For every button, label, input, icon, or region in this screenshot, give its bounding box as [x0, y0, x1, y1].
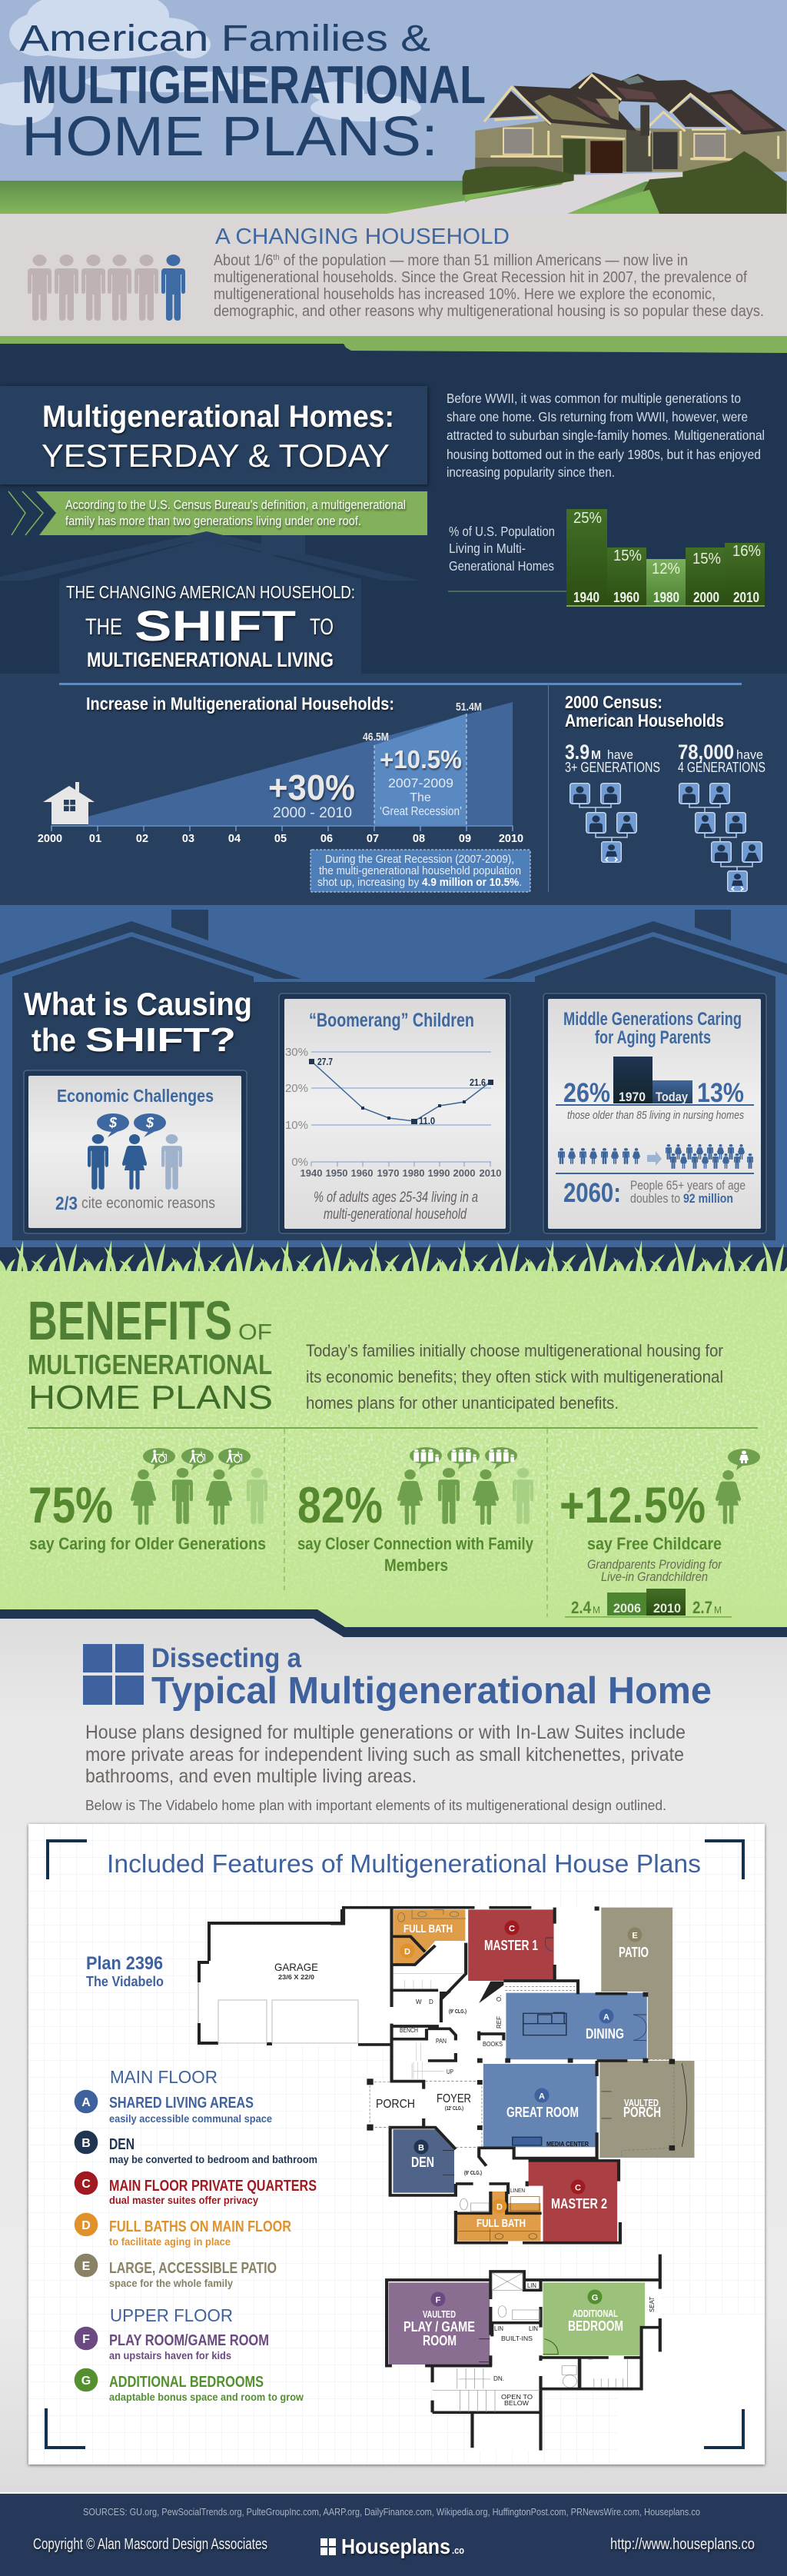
- house-shaped heading: the shift: TO: [310, 614, 334, 640]
- stat: 75 percent: 75%: [28, 1476, 113, 1533]
- bar comparison: 1970: [619, 1090, 646, 1104]
- stat: free childcare: Live-in Grandchildren: [601, 1569, 708, 1584]
- floor plan: main floor: [198, 1906, 695, 2243]
- small plan labels: (12' CLG.): [445, 2106, 463, 2112]
- posts: [367, 1906, 675, 2151]
- floor plan: upper floor: [385, 2255, 661, 2451]
- room labels: PATIO: [619, 1945, 649, 1960]
- corner brackets: [45, 1839, 745, 2449]
- room labels: MASTER 1: [484, 1938, 538, 1953]
- panel: economic challenges: Economic Challenges: [57, 1086, 214, 1106]
- legend item F: F: [82, 2333, 90, 2346]
- room markers: D: [404, 1947, 410, 1956]
- legend item E: LARGE, ACCESSIBLE PATIO: [109, 2260, 277, 2277]
- intro text: House plans designed for multiple generations or with In-Law Suites include: [85, 1722, 686, 1743]
- room markers: B: [418, 2144, 424, 2153]
- bar comparison: [556, 1057, 754, 1122]
- line chart: 1950: [326, 1167, 347, 1179]
- panel: economic challenges: cite economic reasons: [81, 1195, 215, 1212]
- legend item A: [75, 2090, 272, 2125]
- room fills: [468, 1909, 554, 1981]
- small plan labels: W: [416, 1999, 422, 2005]
- small plan labels: BOOKS: [483, 2041, 503, 2048]
- panel: economic challenges: 2/3: [55, 1193, 78, 1214]
- intro text: more private areas for independent living such as small kitchenettes, private: [85, 1744, 684, 1766]
- bar chart: population share: Living in Multi-: [449, 541, 526, 556]
- bar comparison: Today: [656, 1090, 688, 1104]
- bar chart: population share: Generational Homes: [449, 558, 554, 574]
- room markers: G: [592, 2293, 598, 2302]
- area chart: 09: [459, 833, 471, 845]
- panel: middle generations caring: 2060:: [563, 1178, 621, 1208]
- census stats: 3+ GENERATIONS: [565, 760, 660, 775]
- room markers: A: [539, 2092, 545, 2101]
- definition banner: According to the U.S. Census Bureau’s definition, a multigenerational: [65, 498, 406, 512]
- room labels: DINING: [586, 2026, 624, 2042]
- legend item B: may be converted to bedroom and bathroom: [109, 2153, 317, 2165]
- legend item F: an upstairs haven for kids: [109, 2349, 231, 2361]
- area chart: ‘Great Recession’: [380, 805, 462, 818]
- legend item G: [75, 2368, 304, 2403]
- small plan labels: PAN: [436, 2038, 447, 2045]
- small plan labels: D: [429, 1999, 433, 2005]
- small plan labels: PORCH: [376, 2098, 415, 2111]
- title: [19, 18, 486, 168]
- house silhouettes: [0, 910, 787, 1240]
- panel: middle generations caring: People 65+ years of age: [630, 1178, 745, 1193]
- line chart: 1990: [428, 1167, 450, 1179]
- definition banner: family has more than two generations living under one roof.: [65, 514, 361, 528]
- panel: middle generations caring: [543, 993, 766, 1233]
- line chart: 1980: [403, 1167, 424, 1179]
- census stats: 4 GENERATIONS: [678, 760, 765, 775]
- bar chart: population share: 15%: [613, 547, 642, 564]
- legend item G: adaptable bonus space and room to grow: [109, 2391, 304, 2403]
- family tree: four generations: [679, 784, 762, 891]
- area chart: 07: [367, 833, 379, 845]
- small plan labels: UP: [447, 2068, 453, 2075]
- legend item B: [75, 2131, 317, 2165]
- callout: great recession: During the Great Recession (2007-2009),: [325, 853, 514, 866]
- panel: boomerang children: “Boomerang” Children: [309, 1010, 474, 1031]
- line chart: 1940: [301, 1167, 322, 1179]
- header sky panel: [0, 0, 787, 214]
- house-shaped heading: the shift: THE: [85, 614, 122, 640]
- line chart: 11.0: [419, 1115, 435, 1127]
- bar chart: population share: 2000: [693, 590, 719, 605]
- intro text: About 1/6: [214, 252, 280, 269]
- icon: speech bubbles with dollars: $: [145, 1115, 154, 1130]
- room markers: F: [436, 2296, 441, 2305]
- legend item C: C: [81, 2178, 91, 2191]
- line chart: 1970: [377, 1167, 399, 1179]
- room markers: [430, 2290, 603, 2307]
- navy ground and grass: [0, 1247, 787, 1272]
- garage: 23/6 X 22/0: [278, 1974, 315, 1981]
- area chart: 51.4M: [456, 701, 482, 714]
- heading: Dissecting a: [151, 1643, 301, 1673]
- small plan labels: O.: [496, 1995, 503, 2002]
- room markers: D: [496, 2202, 503, 2212]
- logo: Houseplans: [341, 2534, 450, 2558]
- panel: boomerang children: multi-generational household: [324, 1206, 467, 1223]
- house-shaped heading: the shift: [0, 531, 420, 674]
- room labels: [403, 1922, 661, 2230]
- heading panel: Multigenerational Homes:: [42, 400, 394, 434]
- line chart: 21.6: [470, 1077, 486, 1088]
- panel: economic challenges: [24, 1070, 247, 1233]
- intro text: multigenerational households has increased 10%. Here we explore the economic,: [214, 286, 716, 303]
- grey page background for lower section: [0, 1619, 787, 2494]
- census stats: have: [736, 747, 763, 762]
- room labels: VAULTED: [423, 2308, 456, 2320]
- area chart: 2000 - 2010: [273, 805, 352, 821]
- line chart: 2000: [453, 1167, 475, 1179]
- line chart: 1960: [351, 1167, 373, 1179]
- stat: free childcare: +12.5%: [560, 1476, 706, 1533]
- legend item E: E: [82, 2260, 91, 2273]
- room labels: GREAT ROOM: [506, 2105, 579, 2120]
- room labels: DEN: [411, 2155, 434, 2170]
- room labels: MASTER 2: [551, 2196, 607, 2212]
- house-shaped heading: the shift: SHIFT: [134, 601, 296, 650]
- footer: [0, 2492, 787, 2576]
- legend item F: PLAY ROOM/GAME ROOM: [109, 2332, 269, 2349]
- small plan labels: LINEN: [510, 2188, 525, 2194]
- line chart: 10%: [285, 1119, 308, 1132]
- legend item E: space for the whole family: [109, 2277, 233, 2289]
- room markers: [400, 1921, 643, 2213]
- room labels: PORCH: [623, 2105, 661, 2120]
- garage: [198, 1908, 392, 2045]
- room markers: C: [509, 1924, 515, 1933]
- intro text: th: [273, 253, 280, 262]
- heading: MULTIGENERATIONAL: [28, 1349, 272, 1380]
- census stats: 2000 Census:: [565, 692, 662, 712]
- area chart: 04: [228, 833, 241, 845]
- bar chart: population share: 16%: [732, 543, 761, 560]
- legend item D: to facilitate aging in place: [109, 2235, 231, 2248]
- history text: share one home. GIs returning from WWII, however, were: [447, 409, 748, 424]
- legend: main and upper floor: MAIN FLOOR: [110, 2067, 218, 2087]
- media center: [513, 2137, 542, 2145]
- area chart: 02: [136, 833, 148, 845]
- legend item C: dual master suites offer privacy: [109, 2194, 258, 2206]
- room labels: FULL BATH: [477, 2217, 526, 2230]
- room labels: ROOM: [423, 2333, 457, 2348]
- area chart: The: [410, 791, 431, 804]
- house-shaped heading: the shift: MULTIGENERATIONAL LIVING: [87, 648, 334, 671]
- line chart: 30%: [285, 1046, 308, 1059]
- bar comparison: M: [714, 1604, 722, 1616]
- small plan labels: LIN: [494, 2325, 503, 2332]
- stat: free childcare: say Free Childcare: [587, 1534, 722, 1553]
- icon: three people: [88, 1134, 182, 1190]
- intro text: Today’s families initially choose multigenerational housing for: [306, 1341, 723, 1360]
- house-shaped heading: the shift: THE CHANGING AMERICAN HOUSEHOLD:: [66, 582, 355, 602]
- legend item A: easily accessible communal space: [109, 2112, 272, 2125]
- small plan labels: REF: [496, 2016, 503, 2029]
- stat: free childcare: Grandparents Providing for: [587, 1557, 722, 1572]
- bar chart: population share: 25%: [573, 510, 602, 527]
- heading: [24, 986, 252, 1059]
- bar comparison: M: [593, 1604, 600, 1616]
- panel: middle generations caring: for Aging Parents: [595, 1027, 711, 1048]
- area chart: 01: [89, 833, 101, 845]
- clouds: [0, 0, 421, 125]
- heading panel: [0, 386, 427, 484]
- intro text: its economic benefits; they often stick with multigenerational: [306, 1367, 723, 1386]
- bar chart: population share: 1980: [653, 590, 679, 605]
- driveway: [387, 172, 684, 214]
- census stats: American Households: [565, 711, 724, 731]
- history text: increasing popularity since then.: [447, 464, 615, 480]
- room labels: [403, 2308, 623, 2348]
- area chart: 2007-2009: [388, 776, 453, 790]
- history text: [447, 391, 765, 480]
- census stats: have: [607, 747, 633, 762]
- bar chart: population share: 1940: [573, 590, 599, 605]
- callout: great recession: the multi-generational household population: [319, 864, 521, 877]
- line chart: 0%: [291, 1156, 308, 1169]
- bar comparison: [565, 1589, 732, 1618]
- legend: main and upper floor: UPPER FLOOR: [110, 2305, 233, 2325]
- rooms and walls: [330, 1906, 695, 2243]
- section: dissecting a typical home: [0, 1609, 787, 2465]
- area chart: 2000: [38, 833, 62, 845]
- room markers: E: [632, 1932, 638, 1941]
- room markers: C: [575, 2184, 581, 2193]
- heading: BENEFITS: [28, 1291, 232, 1352]
- small plan labels: DN.: [493, 2375, 504, 2382]
- heading: OF: [238, 1320, 272, 1345]
- copyright: Copyright © Alan Mascord Design Associates: [33, 2536, 267, 2553]
- stat: 82 percent: [297, 1447, 534, 1575]
- plan name: Plan 2396: [86, 1953, 163, 1974]
- legend item B: DEN: [109, 2136, 134, 2153]
- intro text: [306, 1341, 723, 1413]
- area chart: 46.5M: [363, 731, 389, 744]
- area chart: +10.5%: [380, 745, 462, 774]
- stat: 82 percent: Members: [384, 1556, 448, 1575]
- title: MULTIGENERATIONAL: [22, 55, 486, 115]
- area chart: 2010: [499, 833, 523, 845]
- area chart: 06: [320, 833, 333, 845]
- section: benefits: [0, 1271, 787, 1627]
- stat: 75 percent: [28, 1448, 267, 1553]
- definition banner: [8, 491, 427, 535]
- heading: SHIFT?: [85, 1021, 236, 1059]
- bar chart: population share: % of U.S. Population: [449, 524, 555, 539]
- area chart: 08: [413, 833, 425, 845]
- census stats: M: [591, 749, 601, 762]
- room labels: VAULTED: [624, 2097, 659, 2108]
- area chart: 05: [274, 833, 287, 845]
- icon: family bubbles: [410, 1447, 517, 1469]
- line chart: 2010: [480, 1167, 501, 1179]
- legend item E: [75, 2254, 277, 2289]
- icon: window logo: [83, 1644, 144, 1705]
- bar comparison: 13%: [697, 1078, 744, 1108]
- legend item C: MAIN FLOOR PRIVATE QUARTERS: [109, 2178, 317, 2195]
- bar comparison: 2.4: [571, 1598, 592, 1617]
- panel title: Included Features of Multigenerational House Plans: [107, 1849, 701, 1878]
- small plan labels: OPEN TO: [501, 2394, 533, 2401]
- area chart: 03: [182, 833, 194, 845]
- heading: [151, 1643, 712, 1712]
- legend item A: A: [81, 2096, 91, 2109]
- intro text: [214, 252, 764, 320]
- history text: Before WWII, it was common for multiple generations to: [447, 391, 741, 406]
- icon: house at start of chart: [43, 782, 95, 824]
- kitchen island: [523, 2012, 566, 2035]
- heading: What is Causing: [24, 986, 252, 1022]
- walls: [330, 1908, 627, 2195]
- line chart: 27.7: [317, 1056, 333, 1067]
- room markers: A: [603, 2013, 609, 2022]
- icon: baby bubble: [728, 1449, 760, 1470]
- legend item B: B: [81, 2137, 91, 2150]
- line chart: 20%: [285, 1082, 308, 1095]
- legend item D: D: [81, 2219, 91, 2232]
- intro text: Below is The Vidabelo home plan with important elements of its multigenerational design outlined.: [85, 1798, 666, 1813]
- small plan labels: [376, 1995, 589, 2194]
- heading: A CHANGING HOUSEHOLD: [215, 225, 510, 249]
- section: what is causing the shift: [0, 905, 787, 1272]
- legend item D: FULL BATHS ON MAIN FLOOR: [109, 2218, 291, 2235]
- stat: free childcare: [560, 1449, 760, 1618]
- icon: population doubling: [558, 1144, 753, 1169]
- panel: a changing household: [0, 214, 787, 336]
- plan name: [86, 1953, 164, 1989]
- intro text: bathrooms, and even multiple living areas.: [85, 1766, 417, 1787]
- legend item D: [75, 2213, 291, 2248]
- icon: six people, one highlighted: [28, 255, 185, 321]
- legend item C: [75, 2172, 317, 2206]
- line chart: [285, 1046, 501, 1179]
- heading: Increase in Multigenerational Households:: [86, 694, 394, 714]
- family tree: three generations: [570, 784, 636, 862]
- small plan labels: FOYER: [437, 2092, 471, 2105]
- heading: [28, 1291, 273, 1416]
- small plan labels: SEAT: [649, 2297, 656, 2312]
- bar chart: population share: [448, 509, 765, 606]
- plan name: The Vidabelo: [86, 1974, 164, 1989]
- heading panel: YESTERDAY & TODAY: [42, 438, 390, 474]
- small plan labels: BENCH: [400, 2027, 418, 2034]
- callout: great recession: shot up, increasing by 4.9 million or 10.5%.: [317, 876, 522, 889]
- intro text: [85, 1722, 686, 1813]
- bar chart: population share: 1960: [613, 590, 639, 605]
- room labels: PLAY / GAME: [403, 2319, 475, 2335]
- bar comparison: 2.7: [692, 1598, 712, 1617]
- icon: speech bubbles with dollars: $: [108, 1115, 118, 1130]
- room labels: FULL BATH: [403, 1922, 453, 1935]
- area chart: +30%: [268, 767, 355, 807]
- title: HOME PLANS:: [22, 106, 438, 168]
- bar comparison: 2006: [613, 1601, 641, 1616]
- area chart: [38, 701, 523, 845]
- small plan labels: BELOW: [504, 2400, 529, 2407]
- bar comparison: 2010: [653, 1601, 681, 1616]
- website: http://www.houseplans.co: [610, 2536, 755, 2553]
- room labels: BEDROOM: [568, 2318, 623, 2334]
- bar chart: population share: 15%: [692, 551, 721, 567]
- callout: great recession: [310, 850, 530, 892]
- stat: 75 percent: say Caring for Older Generations: [29, 1534, 266, 1553]
- panel: middle generations caring: doubles to 92 million: [630, 1191, 733, 1206]
- fixtures and doors: [393, 1909, 466, 1936]
- small plan labels: (9' CLG.): [464, 2171, 482, 2176]
- legend item F: [75, 2327, 269, 2361]
- heading: Typical Multigenerational Home: [151, 1670, 712, 1712]
- house illustration: [475, 72, 786, 175]
- small plan labels: LIN: [529, 2325, 538, 2332]
- intro text: of the population — more than 51 million Americans — now live in: [280, 252, 688, 269]
- census stats: 3.9: [565, 741, 589, 764]
- intro text: homes plans for other unanticipated benefits.: [306, 1393, 619, 1413]
- small plan labels: LIN: [527, 2282, 536, 2289]
- panel: blueprint: [28, 1824, 765, 2465]
- panel: boomerang children: % of adults ages 25-34 living in a: [314, 1190, 478, 1206]
- bar chart: population share: 2010: [733, 590, 759, 605]
- census stats: 78,000: [678, 741, 734, 764]
- lower bath walls: [456, 2192, 620, 2243]
- legend item A: SHARED LIVING AREAS: [109, 2095, 254, 2112]
- section: yesterday and today: [0, 336, 787, 674]
- small plan labels: [493, 2282, 656, 2407]
- grass strip: [0, 181, 787, 214]
- small plan labels: (9' CLG.): [449, 2009, 467, 2015]
- section: increase and census: [0, 674, 787, 905]
- heading: the: [32, 1022, 76, 1058]
- heading: HOME PLANS: [28, 1379, 273, 1416]
- stat: 82 percent: say Closer Connection with Family: [297, 1534, 534, 1553]
- room labels: ADDITIONAL: [573, 2308, 618, 2319]
- stat: 82 percent: 82%: [297, 1476, 383, 1533]
- title: American Families &: [19, 18, 430, 59]
- census stats: [565, 692, 765, 775]
- icon: wheelchair bubbles: [143, 1448, 251, 1470]
- shrubs and lawn: [463, 151, 786, 214]
- bar comparison: those older than 85 living in nursing homes: [567, 1109, 744, 1122]
- bar chart: population share: 12%: [652, 561, 680, 577]
- small plan labels: BUILT-INS: [501, 2335, 533, 2342]
- logo: .co: [452, 2544, 464, 2556]
- icon: speech bubbles with dollars: [97, 1113, 166, 1137]
- legend: main and upper floor: [75, 2067, 317, 2403]
- legend item G: G: [81, 2375, 91, 2388]
- bar comparison: 26%: [563, 1078, 610, 1108]
- legend item G: ADDITIONAL BEDROOMS: [109, 2374, 264, 2391]
- garage: GARAGE: [274, 1961, 318, 1973]
- small plan labels: MEDIA CENTER: [546, 2141, 589, 2148]
- panel: boomerang children: [279, 993, 510, 1233]
